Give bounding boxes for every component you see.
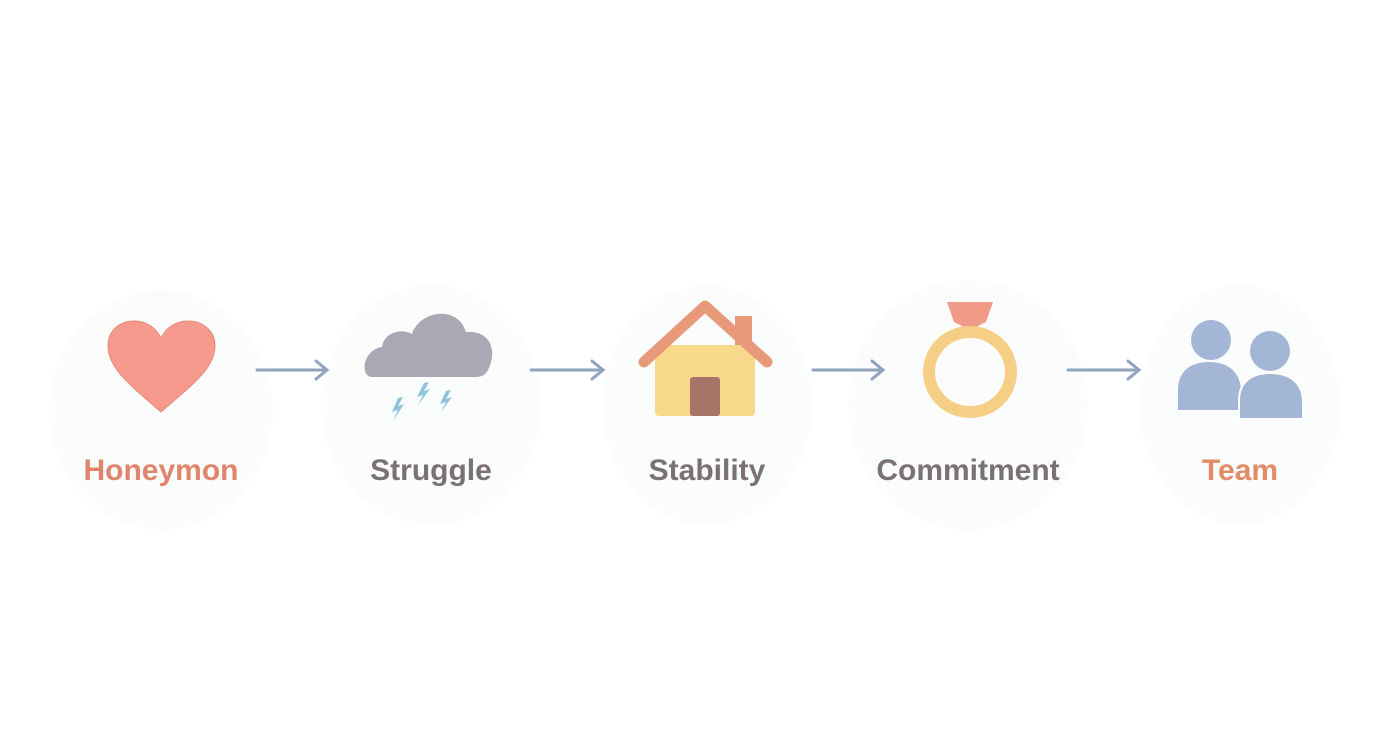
label: Stability: Stability xyxy=(649,454,766,487)
stage: Stability xyxy=(644,306,767,487)
stage: Struggle xyxy=(365,314,492,487)
icon: two people xyxy=(1178,320,1303,419)
arrow 4 xyxy=(1068,361,1139,379)
icon: storm cloud xyxy=(365,314,492,421)
icon: house xyxy=(644,306,767,416)
arrow 2 xyxy=(531,361,603,379)
label: Commitment: Commitment xyxy=(876,454,1060,487)
arrow 3 xyxy=(813,361,883,379)
label: Team: Team xyxy=(1202,454,1278,487)
stage: Commitment xyxy=(876,302,1060,487)
stage: Honeymon xyxy=(83,321,239,487)
label: Struggle: Struggle xyxy=(370,454,492,487)
arrow 1 xyxy=(257,361,327,379)
stage: Team xyxy=(1178,320,1303,487)
icon: heart xyxy=(108,321,215,412)
label: Honeymon: Honeymon xyxy=(83,454,239,487)
icon: ring xyxy=(929,302,1011,412)
